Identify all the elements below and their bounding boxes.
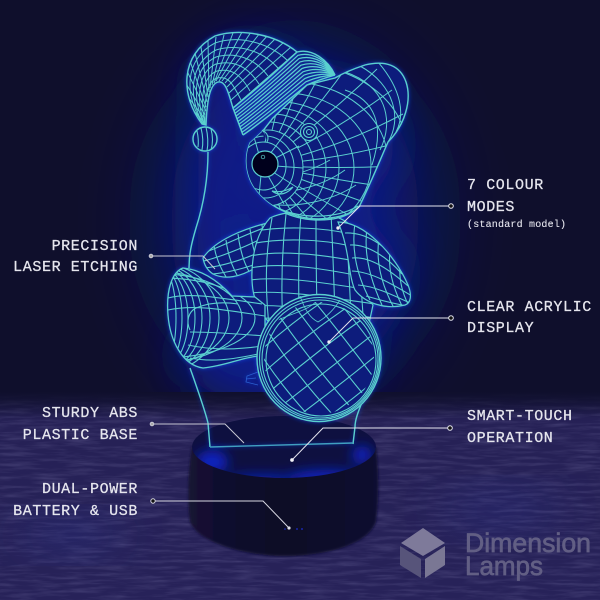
right eye: [300, 124, 318, 140]
label: SMART-TOUCH: [467, 408, 573, 425]
leader line: [291, 426, 452, 461]
hat body: [185, 32, 297, 125]
hat brim: [233, 51, 335, 135]
callout: smart-touch operation: [291, 408, 573, 461]
snout mesh: [246, 130, 304, 206]
label: PRECISION: [52, 238, 138, 255]
leader line: [149, 254, 215, 269]
wordmark: Lamps: [465, 551, 543, 581]
bear 3D wireframe: [164, 28, 414, 450]
leader line: [337, 204, 453, 229]
leader line: [150, 422, 244, 443]
callout: dual-power battery and usb: BATTERY & USB: [13, 503, 138, 520]
callout: dual-power battery and usb: [13, 481, 290, 529]
wordmark: Dimension: [465, 528, 591, 558]
label: 7 COLOUR: [467, 177, 544, 194]
lamp base: [188, 416, 378, 556]
base top surface: [192, 416, 376, 478]
logo: dimension lamps: [400, 528, 591, 581]
textured floor: [0, 392, 600, 600]
leader line: [328, 316, 453, 343]
callout: precision laser etching: LASER ETCHING: [13, 259, 138, 276]
icon: cube: [400, 528, 445, 578]
base side wall: [188, 447, 378, 556]
callout: smart-touch operation: OPERATION: [467, 430, 553, 447]
stand outline and pompom string: [189, 152, 363, 447]
nose: [252, 151, 278, 177]
left foot: [164, 264, 268, 372]
callout: sturdy abs plastic base: [23, 405, 244, 444]
left arm: [200, 222, 266, 280]
callout: precision laser etching: [13, 238, 215, 276]
callout: clear acrylic display: [328, 299, 592, 343]
callout: 7 colour modes: [337, 177, 566, 231]
wordmark: [465, 528, 591, 581]
base light spill: [196, 446, 372, 486]
label: STURDY ABS: [42, 405, 138, 422]
left eye: [262, 130, 268, 142]
right foot: [254, 294, 384, 426]
right arm: [338, 222, 412, 308]
callout: sturdy abs plastic base: PLASTIC BASE: [23, 427, 138, 444]
head and ear: [243, 60, 412, 221]
blue glow behind lamp: [180, 45, 400, 405]
body: [248, 211, 376, 322]
callout: 7 colour modes: MODES: [467, 199, 515, 216]
callout: clear acrylic display: DISPLAY: [467, 320, 534, 337]
label: DUAL-POWER: [42, 481, 138, 498]
neck seam: [280, 206, 358, 220]
wide blue glow: [170, 55, 420, 385]
leader line: [151, 499, 290, 529]
pompom: [193, 127, 217, 151]
led dots: [284, 528, 303, 530]
smile: [272, 187, 293, 194]
faint reflection: [246, 372, 258, 385]
callout: 7 colour modes: (standard model): [467, 219, 566, 231]
label: CLEAR ACRYLIC: [467, 299, 592, 316]
